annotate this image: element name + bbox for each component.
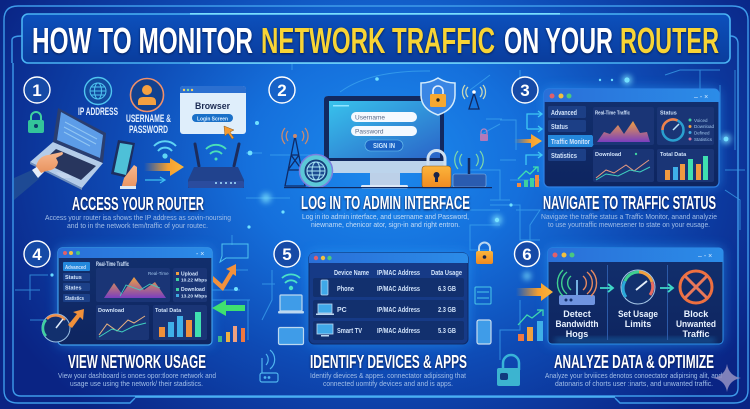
row: smart TV [313, 321, 464, 340]
label: detect bandwidth hogs [556, 309, 598, 339]
icon: orange lock [476, 243, 493, 264]
arrow: small cyan [145, 177, 165, 183]
icon: sparkle watermark [713, 364, 741, 392]
description 3: Navigate the traffie status a Traffic Monitor, anand analyzie [541, 212, 717, 221]
sign in button: SIGN IN [373, 143, 395, 150]
icon: router [188, 144, 244, 188]
heading 5: IDENTIFY DEVICES & APPS [310, 352, 467, 372]
panel 2: log in to admin interface [269, 77, 492, 229]
readout: upload and download: 10.22 Mbps [181, 278, 207, 284]
arrow: teal step [660, 284, 673, 292]
title text: on your: ON YOUR [504, 20, 613, 61]
step number 6: 6 [522, 245, 532, 264]
arrow: orange up [213, 264, 236, 291]
heading 4: VIEW NETWORK USAGE [68, 352, 206, 372]
step number 1 [24, 77, 50, 103]
chart: real-time traffic: Real-Time [148, 271, 169, 276]
sidebar menu: Statistics [65, 296, 84, 302]
row: phone: 6.3 GB [438, 286, 456, 293]
icon: tower top right [462, 85, 486, 109]
label: set usage limits: Set Usage [618, 309, 658, 319]
description 5: Identify dievices & appes. connectator adipissing that [310, 371, 467, 380]
sidebar menu: Advanced [65, 265, 86, 271]
description 5: connected uomtify devices and and is apps. [323, 379, 453, 388]
window glows [58, 89, 723, 345]
icon: phone in hand [111, 140, 137, 189]
row: phone: Phone [337, 286, 354, 293]
icon: growth chart [518, 310, 543, 341]
label: block unwanted traffic: Block [684, 309, 709, 319]
sidebar menu: States [65, 286, 82, 292]
row: phone [313, 278, 464, 297]
chart: download [593, 149, 654, 182]
description 2: niewname, chenicor ator, sign-in and right entron. [311, 220, 460, 229]
step number 3: 3 [520, 81, 530, 100]
icon: small router right [453, 151, 486, 187]
row: smart TV: IP/MAC Address [377, 328, 420, 335]
panel 4: view network usage [24, 241, 248, 388]
readout: upload and download: 13.20 Mbps [181, 294, 207, 300]
row: phone: IP/MAC Address [377, 286, 420, 293]
device table window [309, 253, 468, 344]
gauge: status [657, 107, 715, 145]
chart: real-time traffic: Real-Time Traffic [96, 262, 129, 268]
title text: yellow part: NETWORK TRAFFIC [261, 20, 495, 61]
description 5 [310, 371, 467, 388]
chart: download [96, 305, 149, 340]
row: PC: PC [337, 307, 347, 314]
dashboard window [544, 89, 719, 187]
chart: download: Download [98, 308, 124, 314]
browser window [180, 86, 246, 139]
label: set usage limits [618, 309, 658, 329]
arrow: green left [212, 300, 245, 316]
icon: tablet [278, 328, 304, 344]
icon: growth chart [517, 167, 539, 187]
gauge: status: Statistics [694, 137, 713, 142]
arrow: orange into menu [514, 134, 542, 148]
description 4: View your dashboard is onoes opor:tloore network and [58, 371, 216, 380]
label: username and password: USERNAME & [126, 113, 171, 125]
label: detect bandwidth hogs: Bandwidth [556, 319, 598, 329]
readout: upload and download: Upload [181, 272, 198, 278]
panel 6: analyze data and optimize [514, 242, 723, 388]
dashboard window [58, 248, 212, 345]
ground line [284, 187, 492, 188]
step number 1: 1 [32, 81, 42, 100]
icon: phone [477, 320, 491, 344]
sidebar menu [63, 262, 90, 302]
label: set usage limits: Limits [625, 319, 651, 329]
icon: globe badge [300, 154, 332, 188]
username field: Username [355, 114, 385, 122]
arrow: orange into window [516, 283, 553, 301]
title text: white part: HOW TO MONITOR [32, 20, 253, 61]
icon: radio tower left [282, 128, 308, 186]
title banner [22, 13, 730, 64]
browser window: Browser [195, 101, 230, 111]
icon: block sign [680, 271, 712, 303]
readout: upload and download: Download [181, 287, 205, 293]
dashboard window: - × [196, 251, 204, 258]
chart: total data: Total Data [660, 152, 687, 158]
icon: chat monitor [220, 244, 248, 262]
row: smart TV: Smart TV [337, 328, 362, 335]
description 6: datonaris of chorts user :inarts, and unwanted traffic. [555, 379, 713, 388]
description 3 [541, 212, 717, 229]
icon: globe [84, 78, 112, 104]
step number 6 [514, 242, 540, 266]
icon: wifi cyan [154, 141, 176, 158]
chart: total data [657, 149, 714, 182]
icon: user [130, 78, 164, 112]
chart: total data: Total Data [155, 308, 182, 314]
panel 5: identify devices and apps [260, 241, 520, 388]
sidebar menu: Status [65, 275, 82, 281]
label: block unwanted traffic: Unwanted [676, 319, 716, 329]
description 6 [545, 371, 722, 388]
step number 3 [512, 77, 538, 103]
row: PC [313, 300, 464, 318]
table header: IP/MAC Address [377, 270, 420, 277]
row: PC: 2.3 GB [438, 307, 456, 314]
label: block unwanted traffic [676, 309, 716, 339]
heading 2: LOG IN TO ADMIN INTERFACE [301, 193, 470, 213]
icon: gauge with arrow [42, 309, 84, 342]
gauge: status: Download [694, 124, 715, 129]
icon: small pink lock [480, 129, 488, 141]
table header [334, 270, 462, 277]
glow spots [261, 75, 731, 280]
circuit traces [15, 60, 745, 360]
chart: total data [153, 305, 207, 340]
description 4: usage use using the network/ their stadistics. [70, 379, 203, 388]
chart: real-time traffic: Real-Time Traffic [595, 110, 630, 116]
description 2 [302, 212, 469, 229]
action window: – - × [698, 253, 712, 260]
gauge: status: Defined [694, 130, 710, 136]
browser window: Login Screen [197, 116, 229, 122]
label: detect bandwidth hogs: Hogs [566, 329, 588, 339]
description 1 [45, 213, 231, 230]
label: username and password: PASSWORD [129, 124, 168, 136]
description 4 [58, 371, 216, 388]
table header: Device Name [334, 270, 369, 277]
icon: shield lock [421, 78, 455, 115]
table header: Data Usage [431, 270, 462, 277]
icon: teal lock [497, 355, 520, 386]
icon: big orange lock [422, 150, 451, 188]
icon: disk [475, 287, 491, 304]
description 1: Access your router isa shows the IP address as sovin-noursing [45, 213, 231, 222]
label: detect bandwidth hogs: Detect [563, 309, 591, 319]
description 1: and to in the network tem/traffic of your routec. [67, 221, 208, 230]
step number 2 [269, 77, 295, 103]
arrow: orange to router [144, 158, 184, 176]
sidebar menu: Status [551, 122, 568, 131]
icon: green lock [28, 112, 44, 133]
icon: bar chart small [218, 326, 245, 342]
step number 4: 4 [32, 245, 42, 264]
gauge: status: Voiced [694, 118, 708, 123]
sidebar menu: Traffic Monitor [551, 137, 590, 146]
step number 2: 2 [277, 81, 287, 100]
dashboard window: – - × [694, 94, 708, 101]
action window [548, 248, 723, 344]
label: username and password [126, 113, 171, 136]
icon: router left [260, 350, 278, 382]
icon: gauge [621, 270, 655, 304]
arrow: teal step [600, 284, 613, 292]
arrows: cyan brackets [526, 111, 542, 165]
sidebar menu: Statistics [551, 151, 577, 160]
icon: wifi [282, 274, 300, 289]
row: smart TV: 5.3 GB [438, 328, 456, 335]
step number 5: 5 [282, 245, 292, 264]
circuit nodes [50, 77, 728, 291]
chart: download: Download [595, 152, 621, 158]
sidebar menu: Advanced [551, 108, 577, 117]
row: PC: IP/MAC Address [377, 307, 420, 314]
label: block unwanted traffic: Traffic [682, 329, 710, 339]
password field: Password [355, 128, 384, 136]
panel 3: navigate to traffic status [512, 77, 719, 229]
heading 1: ACCESS YOUR ROUTER [72, 194, 204, 214]
step number 5 [274, 241, 300, 267]
description 2: Log in ito admin interface, and username and Password, [302, 212, 469, 221]
description 3: to use yourtraffic mewnesener to state on your eusage. [548, 220, 710, 229]
icon: laptop [278, 295, 304, 314]
chart: real-time traffic [96, 262, 170, 302]
icon: laptop with hand [14, 108, 106, 200]
description 6: Analyze your brviiices denotos conoectator adipirsing alit, and [545, 371, 722, 380]
panel 1: access your router [14, 77, 246, 230]
sidebar menu [548, 106, 596, 161]
readout: upload and download [173, 268, 207, 302]
icon: router with waves [557, 270, 597, 305]
icon: monitor with login form [324, 96, 444, 188]
gauge: status: Status [660, 110, 677, 116]
label: IP address: IP ADDRESS [78, 106, 118, 118]
chart: real-time traffic [593, 107, 654, 145]
step number 4 [24, 241, 50, 267]
